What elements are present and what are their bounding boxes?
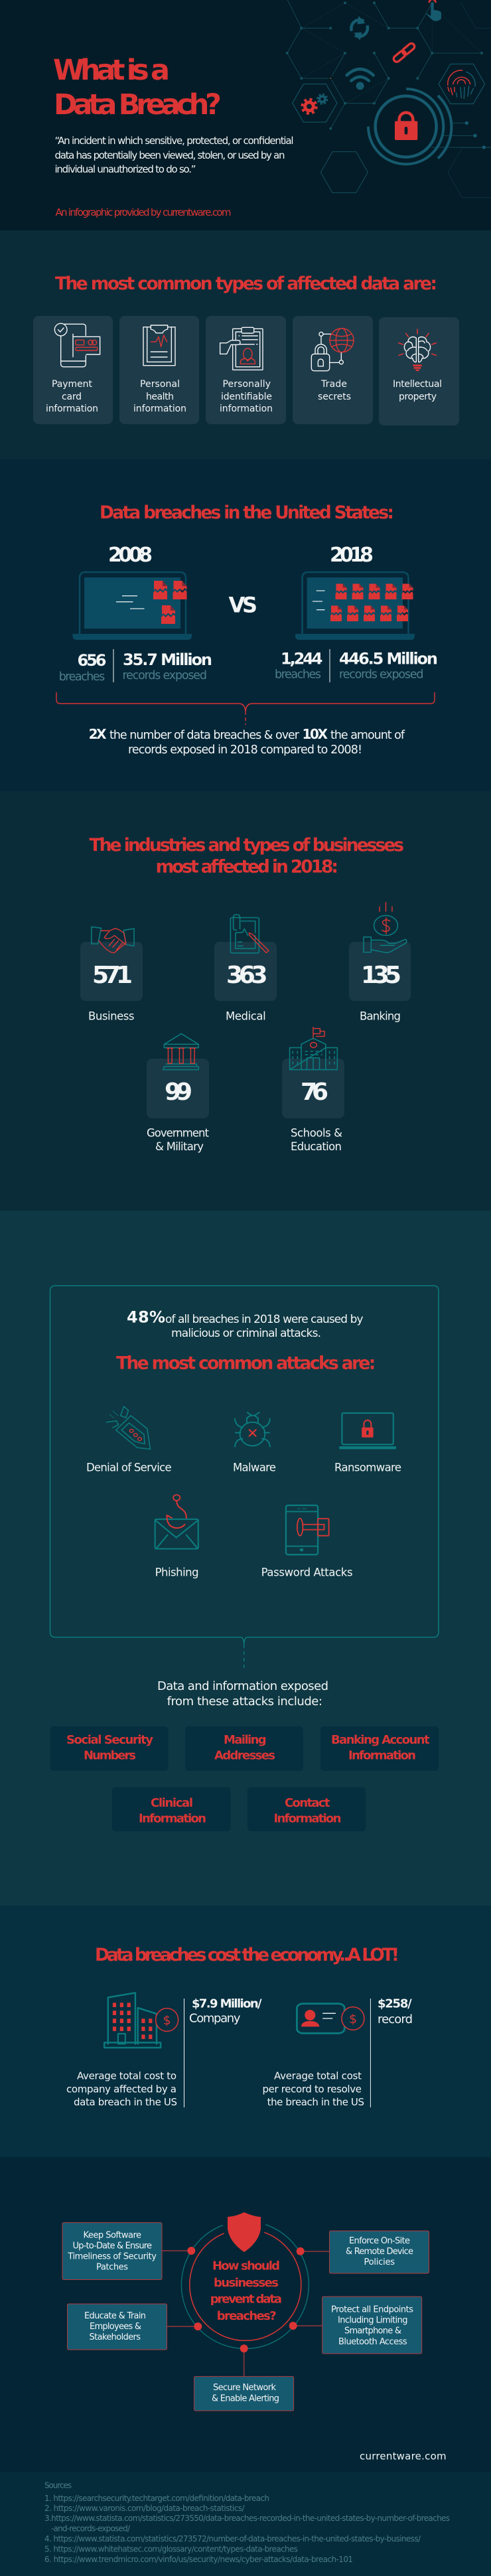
stats: 2018: breaches	[275, 668, 321, 682]
stats: 2008: breaches	[59, 670, 105, 684]
title: What is a	[53, 54, 170, 87]
cost per record	[263, 1997, 413, 2108]
sources list: 3.https://www.statista.com/statistics/273550/data-breaches-recorded-in-the-united-states-by-number-of-breaches	[44, 2514, 450, 2523]
panel: common types of affected data	[0, 230, 491, 459]
comparison summary: records exposed in 2018 compared to 2008!	[128, 743, 362, 757]
tag: social security numbers	[50, 1726, 169, 1771]
label	[318, 379, 351, 402]
stats: 2008: 35.7 Million	[123, 650, 212, 669]
value: $7.9 Million/	[192, 1997, 262, 2011]
value: 363	[226, 962, 268, 989]
description	[263, 2070, 364, 2108]
label: Education	[291, 1140, 342, 1153]
versus label: VS	[228, 592, 257, 617]
label	[220, 379, 273, 414]
step: secure network: & Enable Alerting	[212, 2393, 279, 2403]
comparison summary: 2X	[89, 726, 107, 742]
laptop: 2008	[73, 572, 192, 640]
icon: phone and key	[286, 1505, 329, 1554]
description: company affected by a	[66, 2084, 176, 2095]
panel: attacks and exposed data	[0, 1211, 491, 1906]
step: enforce policies	[329, 2231, 429, 2273]
definition quote	[54, 135, 294, 175]
icon: rocket	[106, 1406, 151, 1449]
value: 99	[165, 1079, 192, 1106]
step: protect endpoints: Including Limiting	[338, 2316, 407, 2326]
icon: brain with light rays	[399, 329, 436, 371]
comparison summary: 10X	[303, 726, 328, 742]
label	[147, 1127, 210, 1153]
icon: school building	[290, 1027, 337, 1070]
website: currentware.com	[360, 2451, 447, 2462]
icon: office building with dollar coin	[104, 1993, 178, 2048]
label: Ransomware	[334, 1462, 401, 1474]
icon: medical clipboard	[143, 325, 175, 366]
sources list: 1. https://searchsecurity.techtarget.com/definition/data-breach	[44, 2494, 269, 2503]
step: enforce policies: & Remote Device	[346, 2247, 413, 2257]
step: secure network: Secure Network	[213, 2383, 276, 2393]
icon: government building	[163, 1033, 198, 1070]
step: keep software up to date: Patches	[96, 2263, 128, 2273]
definition quote: data has potentially been viewed, stolen, or used by an	[54, 149, 285, 161]
attack statistic	[127, 1308, 364, 1340]
step: educate and train	[68, 2304, 167, 2350]
icon: ID card with dollar coin: $	[349, 2012, 357, 2026]
heading: The most common types of affected data are:	[55, 273, 437, 294]
hero network illustration	[286, 0, 491, 198]
step: enforce policies: Enforce On-Site	[349, 2236, 410, 2246]
sources list: 2. https://www.varonis.com/blog/data-breach-statistics/	[44, 2504, 246, 2513]
value	[189, 1997, 262, 2026]
diagram rings and shield	[181, 2212, 309, 2352]
label: Personally	[223, 379, 271, 390]
diagram question	[210, 2259, 282, 2323]
stat: banking	[349, 903, 411, 1022]
step: protect endpoints	[322, 2297, 422, 2354]
card: intellectual property	[379, 317, 459, 425]
icon: laptop with lock	[339, 1413, 396, 1449]
label	[291, 1127, 342, 1153]
connectors	[162, 2251, 329, 2376]
step: keep software up to date: Timeliness of Security	[67, 2252, 157, 2262]
panel: industries most affected	[0, 791, 491, 1211]
tag: contact information: Contact	[285, 1796, 330, 1810]
step: protect endpoints: Protect all Endpoints	[331, 2305, 413, 2315]
cost per company	[66, 1993, 262, 2108]
panel: cost to the economy	[0, 1906, 491, 2157]
title	[53, 54, 222, 121]
stat: government and military	[147, 1033, 210, 1153]
description: data breach in the US	[74, 2096, 177, 2108]
diagram question: businesses	[214, 2276, 279, 2290]
label: Medical	[226, 1010, 266, 1022]
sources list	[44, 2494, 450, 2564]
comparison summary: the number of data breaches & over	[109, 729, 300, 742]
panel: prevention	[0, 2157, 491, 2472]
sources list: 4. https://www.statista.com/statistics/273572/number-of-data-breaches-in-the-united-states-by-business/	[44, 2534, 421, 2543]
exposed data intro	[157, 1679, 328, 1708]
heading: Data breaches cost the economy..A LOT!	[95, 1945, 399, 1965]
label: card	[62, 392, 82, 402]
exposed data intro: from these attacks include:	[167, 1695, 322, 1708]
description: the breach in the US	[267, 2096, 364, 2108]
label: Password Attacks	[261, 1566, 353, 1578]
label	[46, 379, 98, 414]
attack: ransomware	[334, 1413, 401, 1474]
comparison summary	[89, 726, 405, 757]
label: information	[133, 404, 186, 414]
step: educate and train: Educate & Train	[84, 2311, 146, 2321]
attack statistic: of all breaches in 2018 were caused by	[165, 1313, 364, 1326]
step: keep software up to date: Keep Software	[84, 2230, 141, 2240]
tag: banking account information: Banking Account	[331, 1733, 430, 1747]
diagram question: prevent data	[210, 2293, 282, 2307]
step: protect endpoints: Smartphone &	[344, 2326, 401, 2336]
heading: The industries and types of businesses	[89, 835, 404, 856]
year label: 2008: 2008	[108, 544, 153, 567]
tag: mailing addresses	[185, 1726, 303, 1771]
icon: lock and globe	[311, 329, 354, 371]
value: Company	[189, 2012, 241, 2026]
label: secrets	[318, 392, 351, 402]
frame: common attacks	[50, 1286, 439, 1671]
label: Payment	[52, 379, 93, 390]
attack: denial of service	[86, 1406, 172, 1474]
card: trade secrets	[293, 316, 373, 424]
step: secure network	[194, 2376, 294, 2411]
stats: 2018: 1,244	[281, 650, 322, 668]
label: information	[46, 404, 98, 414]
panel: hero	[0, 0, 491, 230]
stat: business	[80, 927, 143, 1022]
label: Personal	[140, 379, 180, 390]
stats: 2008	[59, 649, 212, 684]
heading	[89, 835, 404, 877]
definition quote: “An incident in which sensitive, protected, or confidential	[54, 135, 294, 147]
label: identifiable	[221, 392, 272, 402]
diagram question: breaches?	[217, 2309, 277, 2323]
stats: 2018: 446.5 Million	[339, 650, 438, 668]
card: personally identifiable information	[206, 316, 286, 424]
stats: 2008: 656	[77, 651, 106, 670]
tag: banking account information: Information	[348, 1749, 416, 1763]
icon: bug	[235, 1412, 270, 1446]
stats: 2018	[275, 649, 438, 682]
tag: social security numbers: Numbers	[84, 1749, 136, 1763]
tag: social security numbers: Social Security	[66, 1733, 153, 1747]
icon: medical tablet	[230, 915, 269, 953]
sources list: -and-records-exposed/	[51, 2524, 131, 2534]
label: Trade	[320, 379, 347, 390]
icon: office building with dollar coin: $	[163, 2013, 171, 2028]
diagram question: How should	[212, 2259, 280, 2273]
card: personal health information	[119, 316, 199, 424]
description: per record to resolve	[263, 2084, 362, 2095]
brace connector	[56, 692, 435, 725]
tag: clinical information: Clinical	[151, 1796, 193, 1810]
sources heading: Sources	[44, 2481, 72, 2490]
step: enforce policies: Policies	[364, 2257, 395, 2267]
exposed data intro: Data and information exposed	[157, 1679, 328, 1693]
description: Average total cost to	[77, 2070, 176, 2082]
step: protect endpoints: Bluetooth Access	[338, 2337, 407, 2347]
value: 76	[301, 1079, 328, 1106]
step: keep software up to date	[62, 2222, 162, 2279]
icon: hand and ID clipboard	[220, 327, 263, 370]
panel: data breaches in the United States	[0, 459, 491, 791]
attack: password attacks	[261, 1505, 353, 1578]
label: Banking	[360, 1010, 401, 1022]
icon: hand holding coin	[364, 903, 407, 952]
panel: sources	[0, 2472, 491, 2576]
attack: malware	[233, 1412, 276, 1474]
step: educate and train: Employees &	[90, 2322, 141, 2332]
label: information	[220, 404, 273, 414]
value	[378, 1997, 413, 2026]
label: Schools &	[291, 1127, 342, 1140]
label: Government	[147, 1127, 210, 1140]
tag: banking account information	[320, 1726, 439, 1771]
label: health	[146, 392, 174, 402]
label: Denial of Service	[86, 1462, 172, 1474]
tag: mailing addresses: Mailing	[224, 1733, 267, 1747]
tag: clinical information	[112, 1787, 230, 1831]
comparison summary: the amount of	[330, 729, 405, 742]
icon: ID card with dollar coin	[297, 2004, 364, 2033]
tag: mailing addresses: Addresses	[214, 1749, 275, 1763]
tag: contact information	[247, 1787, 366, 1831]
label: Malware	[233, 1462, 276, 1474]
sources list: 5. https://www.whitehatsec.com/glossary/content/types-data-breaches	[44, 2545, 298, 2554]
step: educate and train: Stakeholders	[89, 2332, 141, 2342]
card: payment card information	[33, 316, 113, 424]
stats: 2008: records exposed	[122, 669, 207, 682]
year label: 2018: 2018	[330, 544, 374, 567]
provider credit: An infographic provided by currentware.com	[56, 206, 231, 218]
heading: Data breaches in the United States:	[100, 502, 394, 523]
value: 135	[361, 962, 401, 989]
tag: clinical information: Information	[139, 1812, 206, 1826]
attack statistic: 48%	[127, 1308, 165, 1327]
value: record	[378, 2012, 413, 2026]
description	[66, 2070, 177, 2108]
label	[133, 379, 186, 414]
description: Average total cost	[274, 2070, 362, 2082]
label: property	[399, 392, 437, 402]
label: Phishing	[155, 1566, 199, 1578]
tag: contact information: Information	[273, 1812, 341, 1826]
laptop: 2018	[295, 572, 415, 640]
label: & Military	[155, 1140, 204, 1153]
value: 571	[92, 962, 133, 989]
attack statistic: malicious or criminal attacks.	[171, 1327, 321, 1340]
heading: The most common attacks are:	[116, 1353, 376, 1374]
label	[393, 379, 442, 402]
label: Intellectual	[393, 379, 442, 390]
definition quote: individual unauthorized to do so.”	[54, 163, 196, 175]
sources list: 6. https://www.trendmicro.com/vinfo/us/security/news/cyber-attacks/data-breach-101	[44, 2555, 353, 2564]
label: Business	[88, 1010, 134, 1022]
icon: phone and card	[54, 323, 101, 367]
attack: phishing	[155, 1495, 199, 1578]
stat: medical	[214, 915, 277, 1022]
icon: handshake	[92, 927, 134, 952]
title: Data Breach?	[54, 88, 222, 121]
heading: most affected in 2018:	[156, 857, 338, 877]
stats: 2018: records exposed	[339, 668, 423, 682]
value: $258/	[378, 1997, 412, 2011]
icon: envelope and hook	[155, 1495, 198, 1549]
stat: schools and education	[282, 1027, 344, 1153]
step: keep software up to date: Up-to-Date & Ensure	[73, 2241, 152, 2251]
